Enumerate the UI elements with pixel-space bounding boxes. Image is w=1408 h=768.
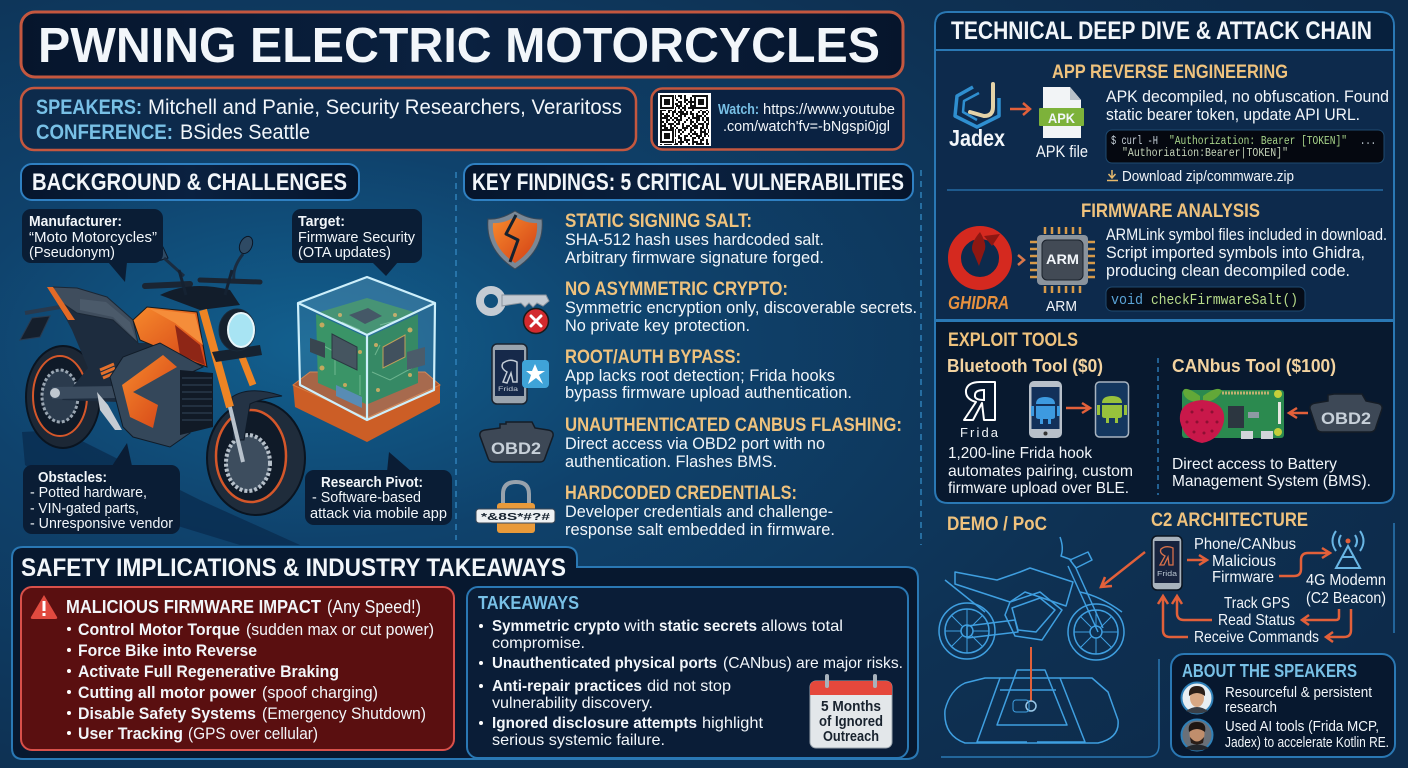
section: app reverse engineering: APP REVERSE ENGINEERING: [1052, 62, 1288, 83]
avatar: first speaker: [1182, 682, 1212, 714]
illustration: potted firmware board in glass cube: [293, 277, 440, 442]
callout: research pivot: - Software-based: [312, 490, 421, 506]
panel: exploit tools: EXPLOIT TOOLS: [948, 330, 1078, 351]
callout: obstacles: Obstacles:: [38, 470, 107, 486]
finding 3: root and auth bypass: ROOT/AUTH BYPASS:: [565, 347, 741, 368]
callout: obstacles: - Potted hardware,: [30, 485, 147, 501]
panel: malicious firmware impact: (GPS over cellular): [188, 725, 318, 743]
panel: about the speakers: [1171, 654, 1395, 757]
panel: takeaways: [467, 587, 908, 758]
finding 5: hardcoded credentials: Developer credentials and challenge-: [565, 503, 833, 521]
panel: malicious firmware impact: Disable Safety Systems: [78, 705, 256, 723]
panel: exploit tools: [935, 321, 1394, 503]
tool: canbus: Management System (BMS).: [1172, 473, 1371, 490]
code block: curl command: "Authoriation:Bearer|TOKEN]": [1122, 147, 1288, 160]
panel: technical deep dive and attack chain: [935, 12, 1394, 320]
code block: curl command: $ curl -H: [1111, 135, 1158, 148]
arrow: OBD2 to raspberry pi: [1289, 408, 1308, 418]
tool: canbus: [1172, 356, 1382, 490]
panel: malicious firmware impact: MALICIOUS FIRMWARE IMPACT: [66, 597, 321, 617]
tool: bluetooth: firmware upload over BLE.: [948, 480, 1129, 497]
icon: Jadex logo: Jadex: [949, 125, 1005, 151]
finding 4: unauthenticated canbus flashing: OBD2: [491, 439, 541, 458]
panel: malicious firmware impact: Activate Full Regenerative Braking: [78, 663, 339, 681]
code block: curl command: "Authorization: Bearer [TOKEN]": [1169, 135, 1347, 148]
panel: malicious firmware impact: (spoof charging): [262, 684, 378, 702]
panel: malicious firmware impact: [21, 587, 454, 750]
icon: APK file: APK: [1048, 110, 1075, 126]
panel: malicious firmware impact: (Emergency Shutdown): [262, 705, 426, 723]
finding 1: static signing salt: SHA-512 hash uses hardcoded salt.: [565, 231, 824, 249]
icon: Jadex logo: [949, 84, 1005, 151]
callout: research pivot: attack via mobile app: [310, 506, 447, 522]
finding 4: unauthenticated canbus flashing: [480, 415, 902, 471]
section: app reverse engineering: APK decompiled, no obfuscation. Found: [1106, 87, 1389, 106]
panel: C2 architecture: C2 ARCHITECTURE: [1151, 510, 1308, 531]
section: app reverse engineering: [949, 62, 1389, 185]
callout: manufacturer: “Moto Motorcycles”: [29, 230, 157, 246]
icon: Frida logo: [960, 382, 999, 440]
panel: takeaways: allows total: [761, 618, 843, 635]
panel: takeaways: TAKEAWAYS: [478, 593, 579, 613]
section: firmware analysis: producing clean decompiled code.: [1106, 262, 1350, 280]
illustration: blueprint motorcycle: [939, 537, 1124, 660]
finding 5: hardcoded credentials: HARDCODED CREDENTIALS:: [565, 483, 797, 504]
finding 4: unauthenticated canbus flashing: Direct access via OBD2 port with no: [565, 435, 825, 453]
speakers and conference panel: [21, 88, 636, 150]
section: firmware analysis: Script imported symbols into Ghidra,: [1106, 244, 1365, 262]
panel: takeaways: Symmetric crypto: [492, 618, 620, 635]
finding 2: no asymmetric crypto: [480, 279, 917, 335]
panel: C2 architecture: [1101, 510, 1394, 646]
icon: ARM chip: [1030, 227, 1095, 315]
watch link panel with QR code: Watch:: [718, 101, 759, 118]
panel: safety implications and industry takeaways: [12, 547, 918, 759]
code block: curl command: ...: [1360, 135, 1376, 148]
arrows: modem back to phone: [1158, 596, 1351, 642]
watch link panel with QR code: .com/watch'fv=-bNgspi0jgl: [723, 118, 890, 135]
illustration: electric motorcycle: [20, 234, 305, 545]
section: firmware analysis: FIRMWARE ANALYSIS: [1081, 201, 1260, 222]
panel: about the speakers: research: [1225, 700, 1277, 716]
callout: obstacles: - VIN-gated parts,: [30, 501, 139, 517]
icon: ARM chip: ARM: [1046, 251, 1079, 267]
arrow: Ghidra to ARM: [1018, 255, 1024, 265]
code block: checkFirmwareSalt: [1106, 287, 1305, 311]
panel: takeaways: did not stop: [647, 678, 731, 695]
panel: malicious firmware impact: (sudden max or cut power): [246, 621, 434, 639]
panel: takeaways: vulnerability discovery.: [492, 695, 653, 712]
icon: 4G cell tower: [1332, 531, 1364, 568]
section: firmware analysis: [948, 201, 1387, 315]
icon: calendar 5 months of ignored outreach: [810, 674, 892, 748]
finding 4: unauthenticated canbus flashing: UNAUTHENTICATED CANBUS FLASHING:: [565, 415, 902, 436]
panel: takeaways: (CANbus) are major risks.: [723, 655, 903, 672]
watch link panel with QR code: [652, 88, 904, 150]
finding 3: root and auth bypass: bypass firmware upload authentication.: [565, 384, 852, 402]
panel: about the speakers: Used AI tools (Frida MCP,: [1225, 719, 1379, 735]
finding 1: static signing salt: [488, 211, 824, 269]
finding 1: static signing salt: STATIC SIGNING SALT:: [565, 211, 752, 232]
panel: malicious firmware impact: Cutting all motor power: [78, 684, 257, 702]
finding 5: hardcoded credentials: response salt embedded in firmware.: [565, 521, 835, 539]
arrow: phone to malicious firmware: [1187, 555, 1207, 565]
tool: bluetooth: Bluetooth Tool ($0): [947, 356, 1103, 376]
arrow: firmware to modem: [1279, 548, 1330, 576]
arrow: phone to demo bike: [1101, 552, 1145, 587]
finding 2: no asymmetric crypto: No private key protection.: [565, 317, 750, 335]
icon: APK file: [1036, 87, 1088, 161]
finding 1: static signing salt: Arbitrary firmware signature forged.: [565, 249, 824, 267]
icon: raspberry pi board: [1180, 389, 1284, 443]
tool: bluetooth: 1,200-line Frida hook: [948, 445, 1093, 462]
panel: C2 architecture: Firmware: [1212, 569, 1274, 586]
callout: obstacles: - Unresponsive vendor: [30, 516, 173, 532]
icon: Ghidra logo: [948, 232, 1009, 313]
finding 3: root and auth bypass: [492, 344, 852, 404]
panel: takeaways: with: [623, 618, 655, 635]
callout: manufacturer: (Pseudonym): [29, 245, 115, 261]
icon: ARM chip: ARM: [1046, 298, 1077, 315]
callout: obstacles: [23, 443, 180, 534]
panel: malicious firmware impact: Control Motor Torque: [78, 621, 240, 639]
panel: C2 architecture: Receive Commands: [1194, 629, 1319, 646]
heading: key findings: KEY FINDINGS: 5 CRITICAL VULNERABILITIES: [472, 169, 904, 196]
section: app reverse engineering: static bearer token, update API URL.: [1106, 105, 1360, 124]
icon: phone with blue android: [1029, 381, 1062, 438]
panel: demo and proof of concept: DEMO / PoC: [947, 514, 1047, 535]
icon: OBD2 connector: OBD2: [1321, 409, 1371, 428]
callout: manufacturer: Manufacturer:: [29, 214, 122, 230]
panel: about the speakers: Resourceful & persistent: [1225, 685, 1372, 701]
panel: takeaways: Anti-repair practices: [492, 678, 642, 695]
avatar: second speaker: [1182, 720, 1212, 750]
tool: canbus: CANbus Tool ($100): [1172, 356, 1336, 376]
code block: checkFirmwareSalt: void: [1111, 292, 1143, 309]
panel: C2 architecture: Track GPS: [1224, 595, 1290, 612]
panel: takeaways: static secrets: [659, 618, 757, 635]
finding 5: hardcoded credentials: *&8S*#?#: [481, 512, 551, 523]
icon: phone running Frida: Frida: [1157, 571, 1177, 578]
panel: takeaways: Unauthenticated physical ports: [492, 655, 717, 672]
finding 3: root and auth bypass: Frida: [498, 387, 519, 393]
panel: takeaways: highlight: [702, 715, 764, 732]
arrow: Jadex to APK: [1010, 103, 1030, 115]
icon: calendar 5 months of ignored outreach: of Ignored: [819, 714, 883, 730]
icon: phone with green android: [1096, 382, 1128, 437]
callout: target: Target:: [298, 214, 345, 230]
callout: research pivot: [305, 452, 452, 525]
download line: Download zip/commware.zip: [1122, 168, 1294, 185]
finding 5: hardcoded credentials: [476, 482, 835, 539]
icon: calendar 5 months of ignored outreach: Outreach: [823, 729, 879, 745]
panel: about the speakers: ABOUT THE SPEAKERS: [1182, 661, 1357, 681]
finding 4: unauthenticated canbus flashing: authentication. Flashes BMS.: [565, 453, 777, 471]
panel: C2 architecture: Phone/CANbus: [1194, 536, 1296, 553]
panel: malicious firmware impact: (Any Speed!): [327, 597, 421, 617]
illustration: blueprint platform with connector: [945, 647, 1118, 743]
panel: takeaways: Ignored disclosure attempts: [492, 715, 697, 732]
tool: bluetooth: [947, 356, 1133, 497]
panel: C2 architecture: Read Status: [1218, 612, 1295, 629]
panel: C2 architecture: 4G Modemn: [1306, 572, 1386, 589]
panel: malicious firmware impact: Force Bike into Reverse: [78, 642, 257, 660]
panel: demo and proof of concept: [939, 514, 1159, 757]
speakers and conference panel: BSides Seattle: [180, 121, 310, 144]
panel: malicious firmware impact: User Tracking: [78, 725, 183, 743]
panel: takeaways: compromise.: [492, 635, 585, 652]
code block: curl command: [1106, 130, 1384, 163]
finding 2: no asymmetric crypto: NO ASYMMETRIC CRYPTO:: [565, 279, 788, 300]
icon: APK file: APK file: [1036, 142, 1088, 161]
speakers and conference panel: SPEAKERS:: [36, 96, 142, 119]
icon: calendar 5 months of ignored outreach: 5 Months: [821, 699, 881, 715]
callout: research pivot: Research Pivot:: [321, 475, 423, 491]
finding 3: root and auth bypass: App lacks root detection; Frida hooks: [565, 367, 835, 385]
tool: canbus: Direct access to Battery: [1172, 456, 1337, 473]
callout: manufacturer: [22, 209, 163, 282]
icon: OBD2 connector: [1310, 394, 1382, 432]
speakers and conference panel: CONFERENCE:: [36, 121, 173, 144]
heading: background and challenges: BACKGROUND & CHALLENGES: [32, 169, 347, 196]
icon: Frida logo: Frida: [960, 425, 999, 440]
icon: Ghidra logo: GHIDRA: [948, 293, 1009, 313]
watch link panel with QR code: https://www.youtube: [763, 101, 895, 118]
title banner: PWNING ELECTRIC MOTORCYCLES: [38, 19, 880, 73]
panel: takeaways: serious systemic failure.: [492, 732, 665, 749]
tool: bluetooth: automates pairing, custom: [948, 463, 1133, 480]
panel: C2 architecture: Malicious: [1212, 553, 1276, 570]
arrow: phone to phone: [1066, 403, 1090, 413]
heading: background and challenges: [21, 164, 359, 200]
heading: key findings: [464, 164, 913, 200]
callout: target: Firmware Security: [298, 230, 416, 246]
finding 2: no asymmetric crypto: Symmetric encryption only, discoverable secrets.: [565, 299, 917, 317]
panel: C2 architecture: (C2 Beacon): [1306, 590, 1386, 607]
icon: phone running Frida: [1152, 536, 1182, 590]
panel: safety implications and industry takeaways: SAFETY IMPLICATIONS & INDUSTRY TAKEAWAYS: [21, 554, 566, 582]
callout: target: [292, 209, 422, 276]
code block: checkFirmwareSalt: checkFirmwareSalt(): [1151, 292, 1298, 309]
speakers and conference panel: Mitchell and Panie, Security Researchers, Veraritoss: [148, 96, 622, 119]
callout: target: (OTA updates): [298, 245, 391, 261]
